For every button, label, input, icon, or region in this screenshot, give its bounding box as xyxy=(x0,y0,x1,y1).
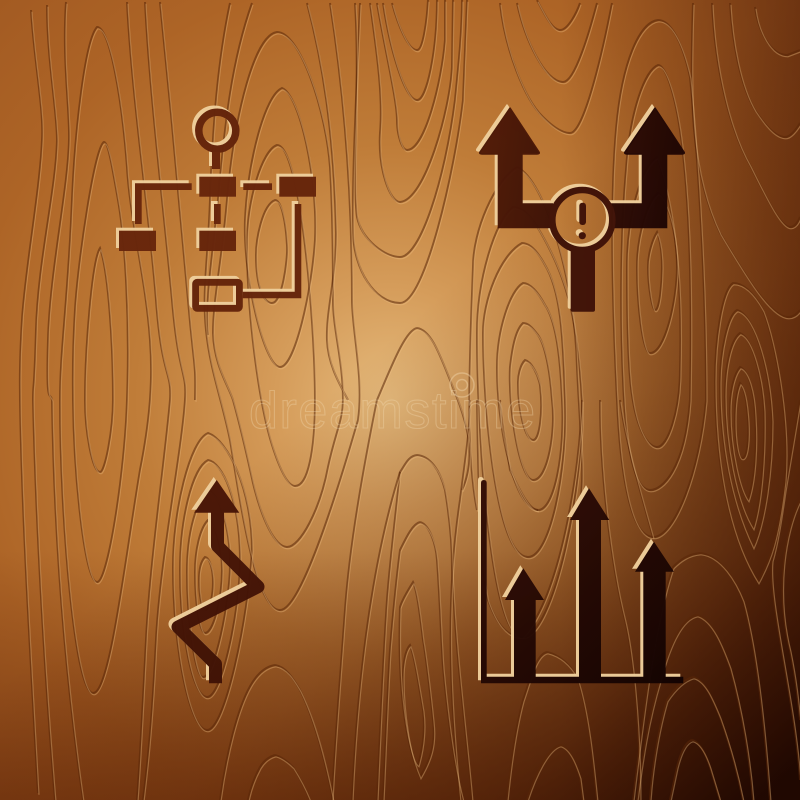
watermark: dreamstime xyxy=(249,382,537,440)
icon: flowchart xyxy=(119,112,316,308)
icon: arrows with magnifier alert xyxy=(480,108,684,312)
icon: zigzag arrow xyxy=(178,480,258,683)
icon: arrow bar chart xyxy=(481,480,683,683)
